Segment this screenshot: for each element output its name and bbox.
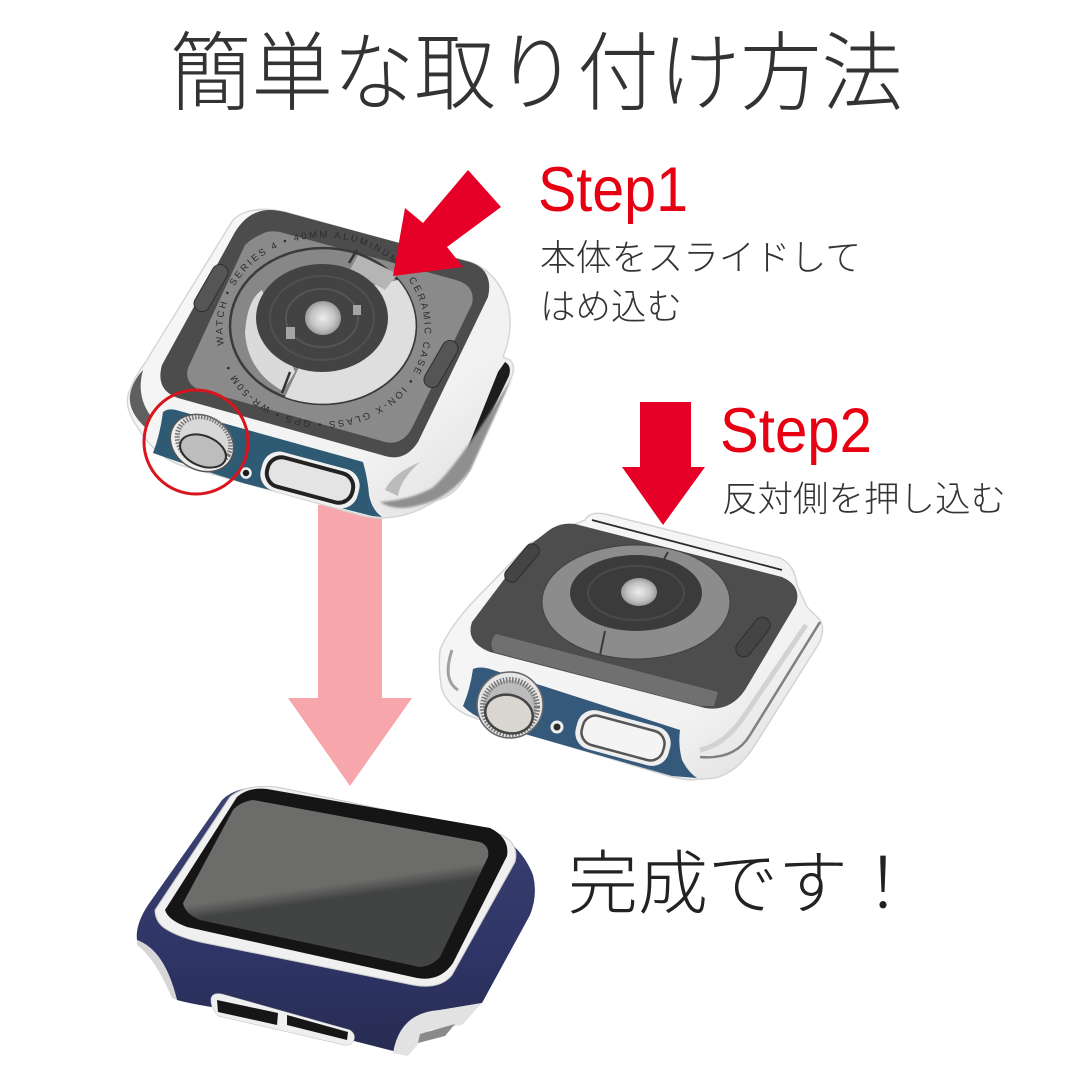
digital crown	[160, 403, 244, 483]
side band	[153, 409, 382, 517]
heading: Step2: Step2	[720, 396, 872, 466]
title: 簡単な取り付け方法	[170, 26, 903, 122]
black bezel	[165, 789, 507, 979]
silver lower edges	[137, 940, 177, 1000]
screen	[183, 800, 488, 967]
back inset	[187, 231, 473, 443]
side button	[571, 706, 675, 770]
silver rim	[155, 786, 516, 986]
back ring	[542, 545, 730, 659]
back buttons	[502, 541, 542, 585]
back buttons	[191, 261, 231, 315]
text: step 1 description	[540, 237, 861, 327]
left inner rim	[448, 650, 458, 690]
back ring	[230, 248, 416, 404]
text: step 1 description: 本体をスライドして	[540, 237, 861, 278]
back plate	[470, 524, 797, 709]
watch: finished	[137, 786, 535, 1056]
dark side reflections	[130, 370, 150, 428]
back engraving: WATCH • SERIES 4 • 40MM ALUMINUM & CERAMIC CASE • ION-X GLASS • GPS • WR-50M •	[216, 231, 432, 428]
icon: red arrow step 2	[622, 402, 705, 525]
pink arrow: to finished case	[288, 505, 412, 786]
digital crown	[477, 672, 543, 738]
heading: Step1: Step1	[538, 155, 688, 225]
text: step 1 description: はめ込む	[540, 286, 682, 327]
watch: step 1	[126, 208, 514, 519]
text: step 2 description: 反対側を押し込む	[722, 479, 1006, 519]
watch: step 2	[439, 513, 823, 780]
back plate	[160, 210, 489, 457]
right inner rim	[700, 622, 820, 757]
red circle highlight on crown	[144, 390, 248, 494]
side button	[257, 448, 363, 512]
icon: red arrow step 1	[393, 170, 501, 276]
side band	[463, 668, 697, 778]
band slots	[211, 994, 354, 1045]
top rail	[592, 520, 782, 570]
text: finished: 完成です！	[568, 845, 918, 923]
